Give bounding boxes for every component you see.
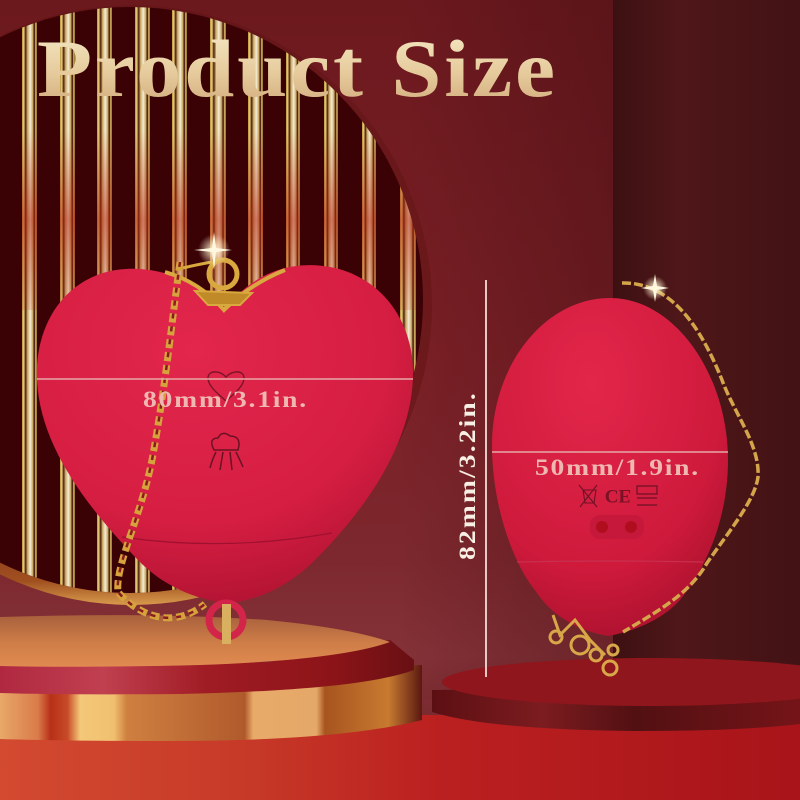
red buttons [590, 515, 644, 539]
left podium [0, 615, 422, 741]
window rim [0, 5, 432, 605]
podium top surface [0, 615, 390, 667]
gold clasp [165, 260, 285, 310]
gold chain [118, 262, 205, 618]
egg product [492, 274, 758, 675]
gold chain [622, 283, 758, 632]
podium top [442, 658, 800, 706]
right dark wall panel [613, 0, 800, 690]
heart seam [122, 533, 332, 544]
wall shading [0, 0, 613, 700]
podium red band [0, 640, 414, 694]
heart product [37, 232, 413, 644]
gold chain cluster [550, 615, 618, 675]
certification marks: CE [605, 485, 631, 506]
egg seam [517, 561, 703, 562]
dimension: egg height: 82mm/3.2in. [455, 393, 480, 560]
icon: steam cloud [210, 433, 243, 470]
right podium [432, 658, 800, 731]
floor [0, 715, 800, 800]
podium base [432, 685, 800, 731]
circular window with gold bars [0, 0, 432, 605]
sparkle [641, 274, 669, 302]
podium gold side [0, 665, 422, 741]
egg body [492, 298, 728, 636]
title: Product Size [37, 23, 555, 114]
certification marks [579, 485, 657, 507]
gold charm link [222, 604, 231, 644]
dimension: egg width: 50mm/1.9in. [535, 455, 698, 480]
icon: heart button [208, 372, 244, 401]
dimension: heart width: 80mm/3.1in. [143, 387, 306, 412]
loop charm [209, 603, 243, 637]
heart body [37, 265, 413, 603]
sparkle [194, 232, 232, 270]
